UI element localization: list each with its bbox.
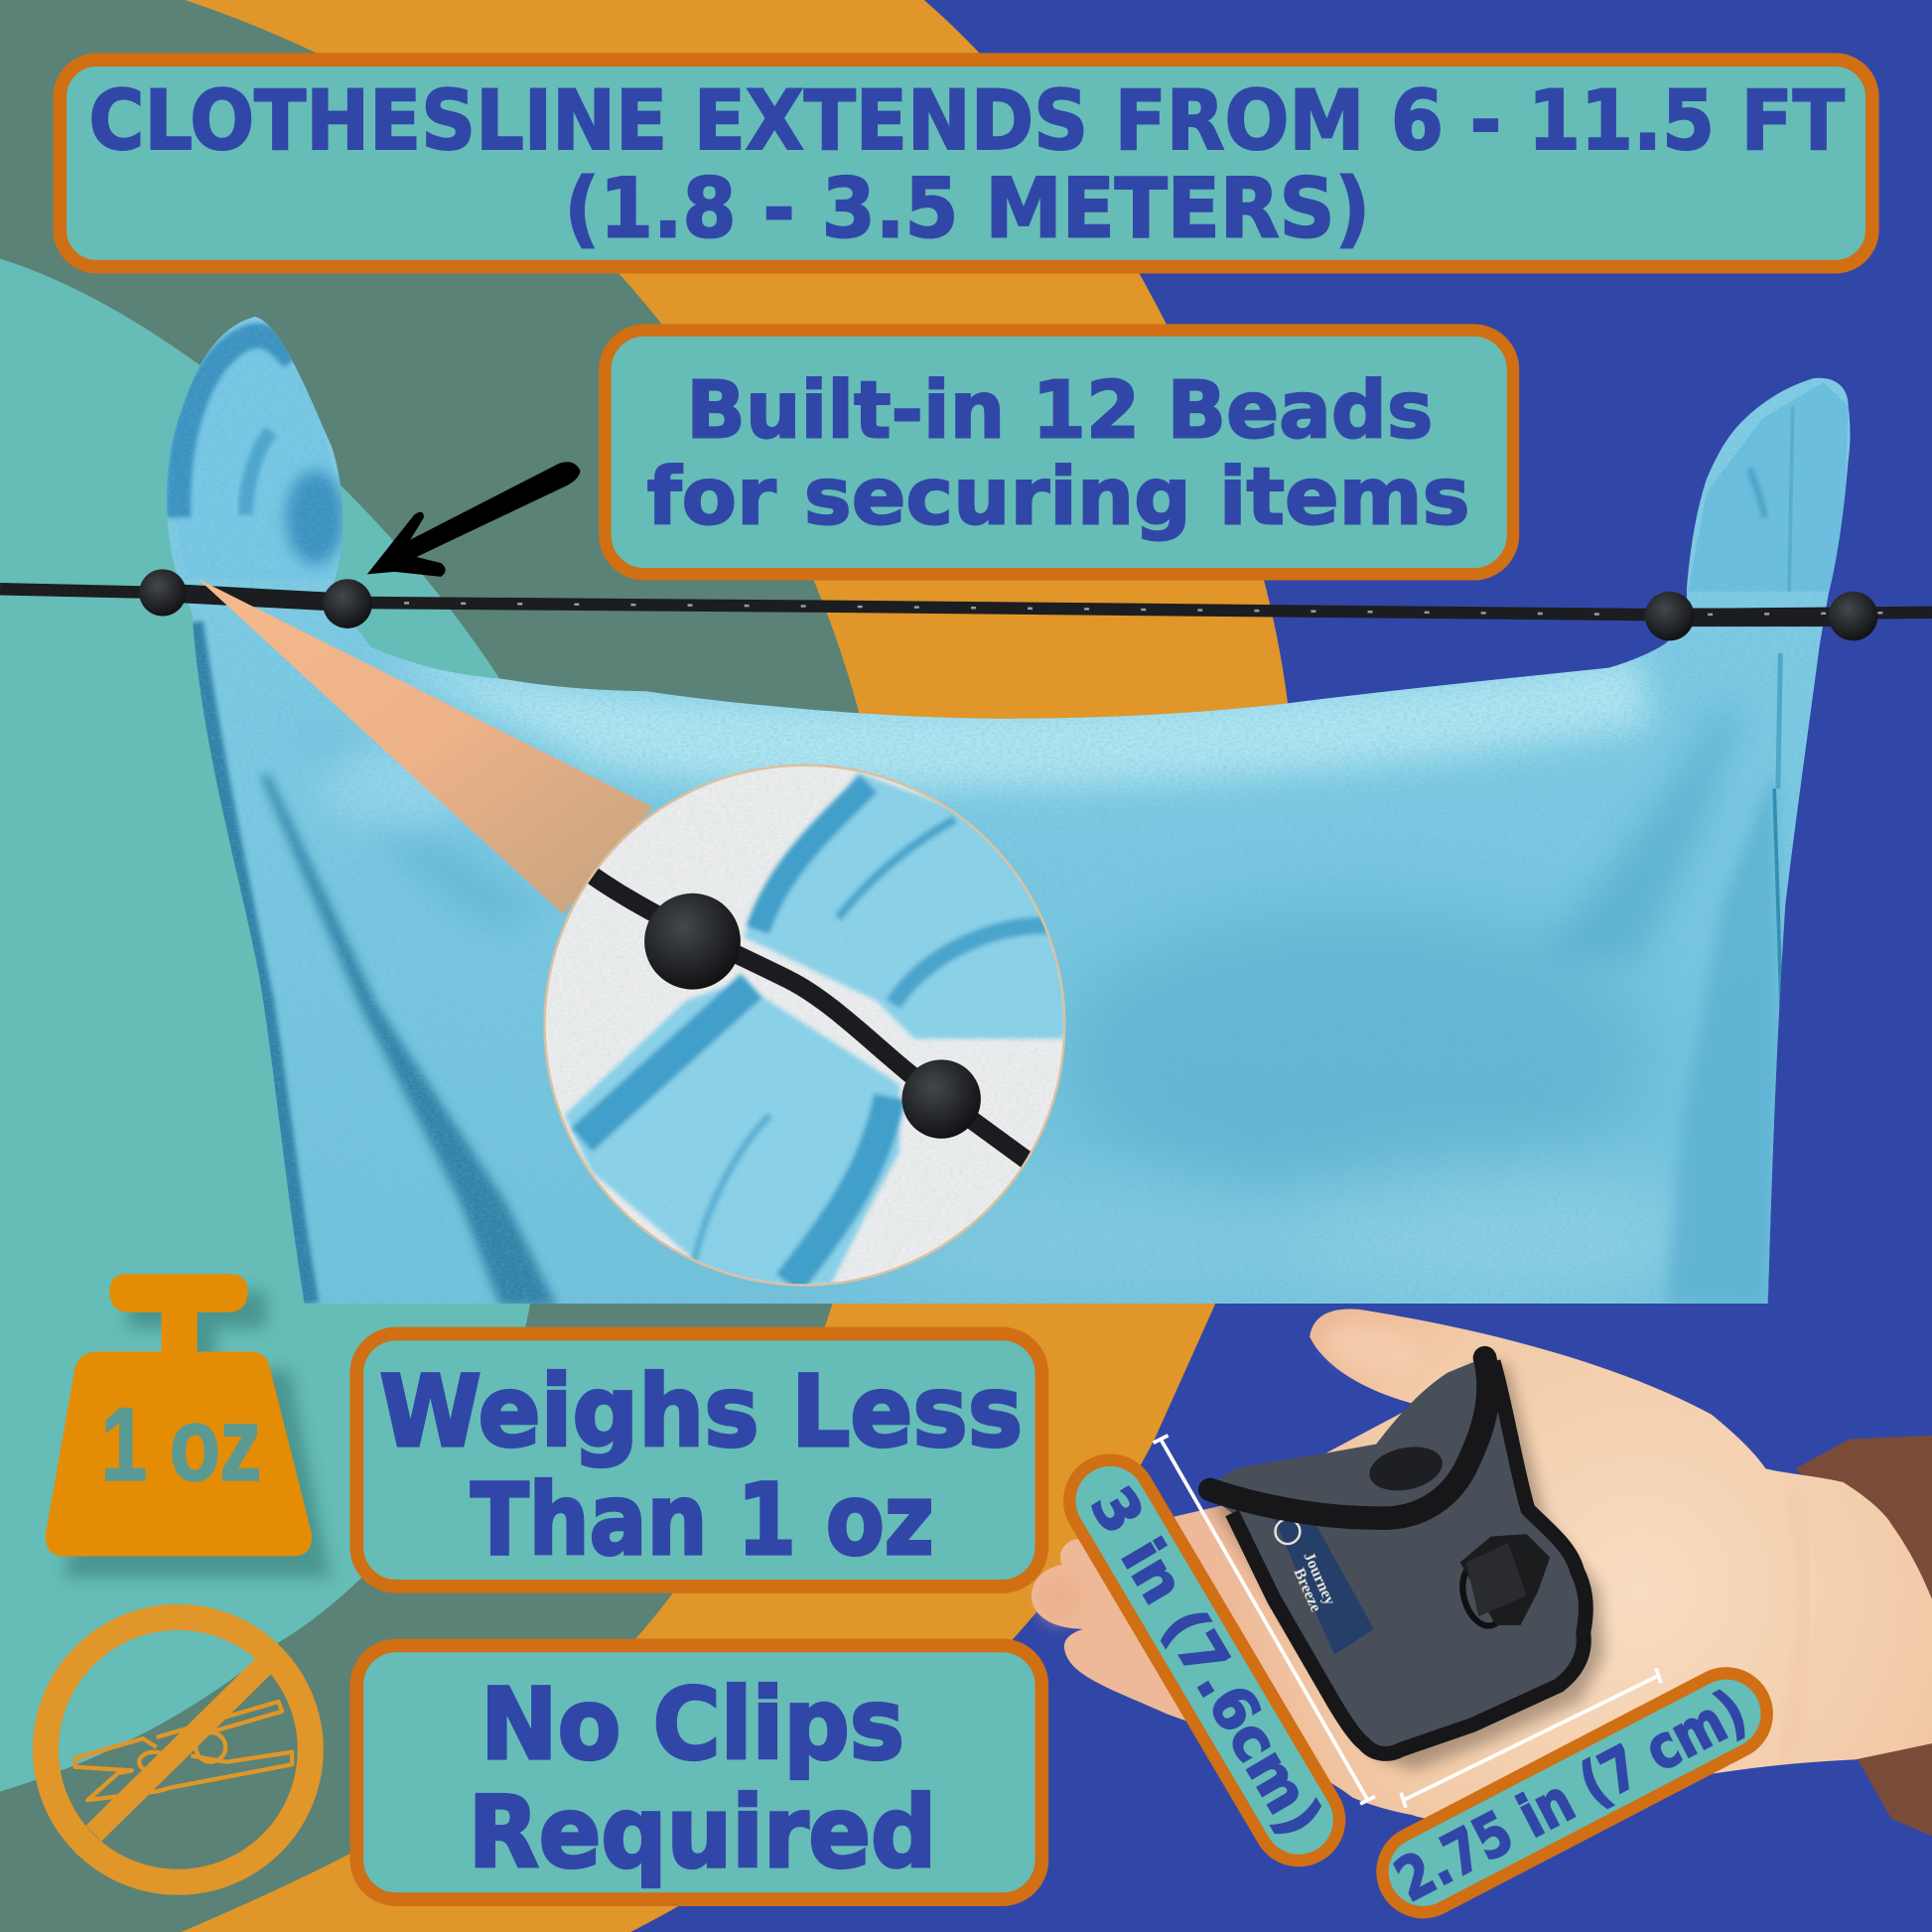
clips text line 2: Required xyxy=(469,1776,936,1890)
pill label: 3 in: 3 in (7.6cm) xyxy=(1076,1476,1334,1848)
icon: 1 oz weight xyxy=(46,1274,331,1578)
pouch label: Journey xyxy=(1300,1550,1338,1607)
pouch border xyxy=(1232,1361,1586,1753)
magnified detail circle xyxy=(542,763,1072,1294)
callout line 2: for securing items xyxy=(647,450,1470,542)
dimension line: 3 in xyxy=(1154,1436,1375,1804)
magnifier wedge xyxy=(199,579,653,914)
bead: right 2 xyxy=(1829,592,1877,640)
pill label: 2.75 in: 2.75 in (7 cm) xyxy=(1385,1678,1757,1916)
pouch label: Breeze xyxy=(1290,1566,1324,1614)
towel texture xyxy=(148,296,1872,1318)
bead: right 1 xyxy=(1645,592,1694,640)
clothespin outline xyxy=(75,1702,292,1800)
towel hanging on clothesline xyxy=(148,296,1872,1318)
callout: weighs less than 1 oz xyxy=(356,1333,1041,1587)
title line 2: (1.8 - 3.5 METERS) xyxy=(564,160,1370,256)
buckle xyxy=(1456,1534,1550,1630)
bead: left 2 xyxy=(323,579,372,628)
travel pouch xyxy=(1200,1353,1604,1770)
weight text line 1: Weighs Less xyxy=(379,1355,1023,1469)
clothesline cord xyxy=(0,589,1932,618)
clips text line 1: No Clips xyxy=(481,1668,904,1782)
pouch body xyxy=(1200,1353,1586,1753)
palm and fingers xyxy=(1032,1309,1932,1820)
weight text line 2: Than 1 oz xyxy=(471,1463,934,1578)
pouch label xyxy=(1274,1519,1374,1655)
towel shading xyxy=(173,323,1849,1312)
icon: no clothespin xyxy=(46,1617,311,1882)
dimension line: 2.75 in xyxy=(1401,1668,1661,1808)
callout: no clips required xyxy=(356,1645,1041,1899)
hand holding pouch xyxy=(1032,1309,1932,1836)
snap button xyxy=(1365,1441,1447,1497)
arrow pointing to bead xyxy=(367,462,581,577)
callout: built-in beads xyxy=(605,331,1513,574)
prohibition ring xyxy=(46,1617,311,1882)
title banner xyxy=(60,60,1872,267)
thumb and finger shading xyxy=(1037,1315,1804,1756)
callout line 1: Built-in 12 Beads xyxy=(686,364,1433,457)
sleeve xyxy=(1795,1436,1932,1836)
weight label: 1 oz xyxy=(101,1388,261,1503)
pouch flap edge xyxy=(1210,1358,1488,1518)
bead: left 1 xyxy=(139,569,186,617)
